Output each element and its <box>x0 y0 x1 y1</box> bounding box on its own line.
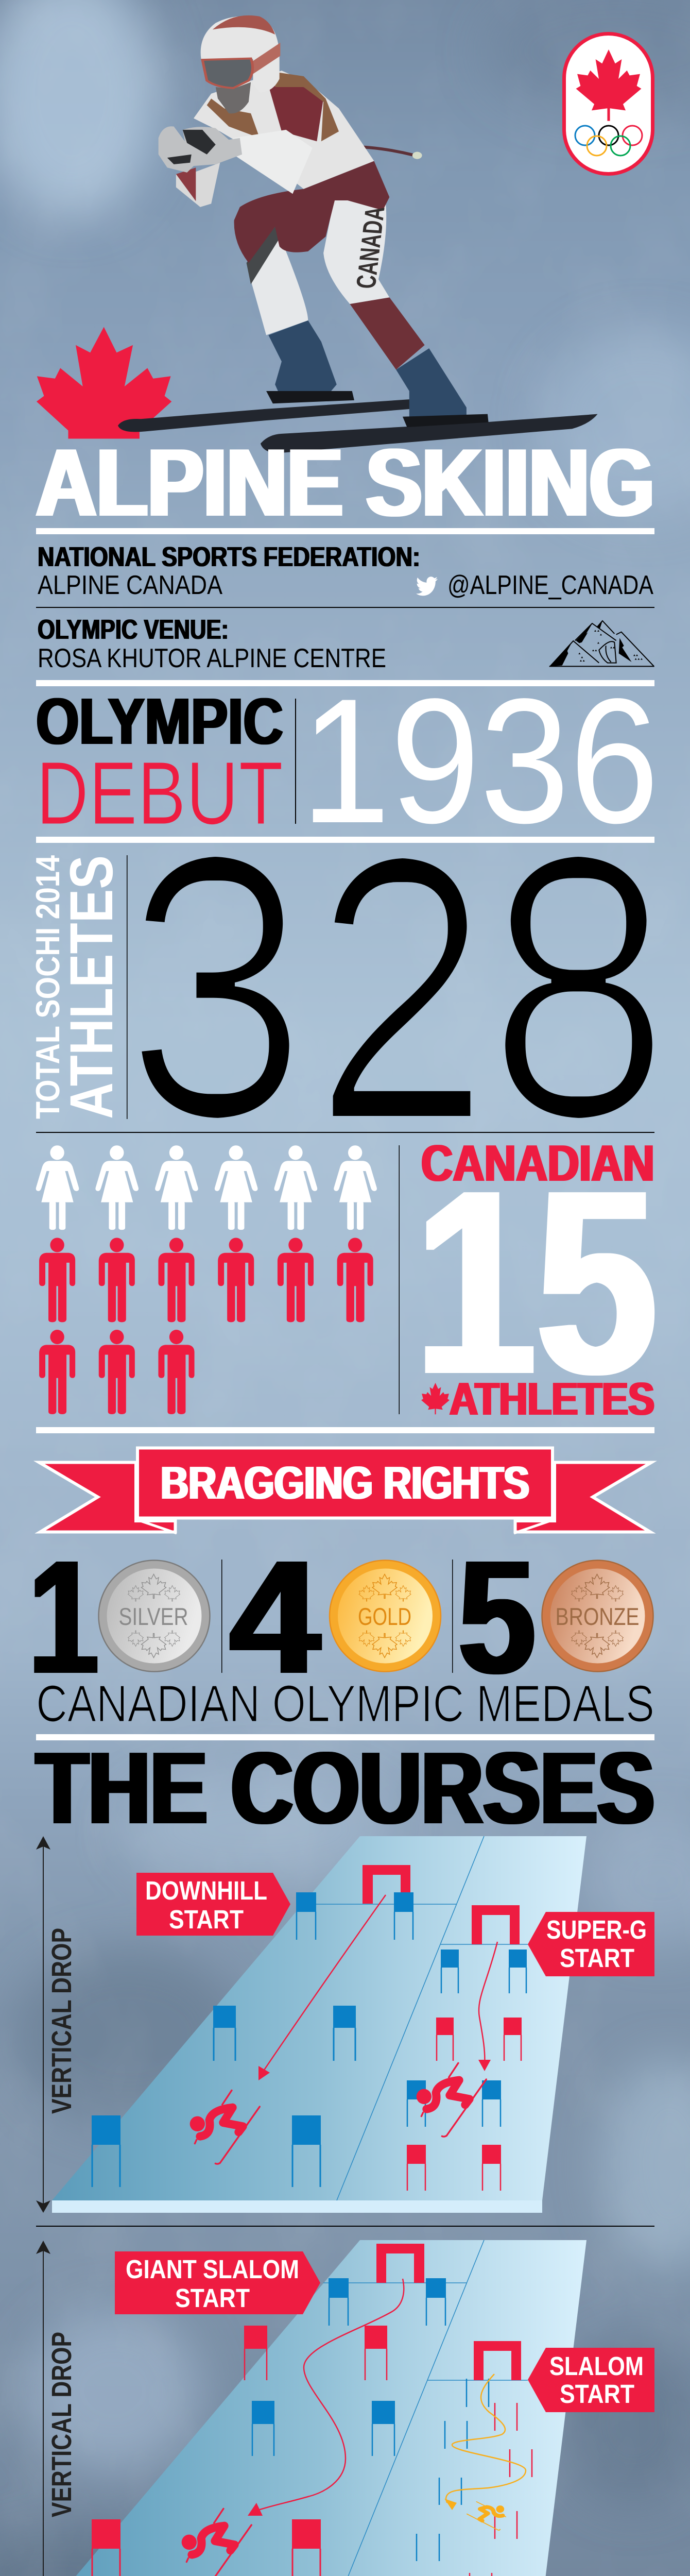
downhill start label: DOWNHILL <box>145 1876 267 1905</box>
federation name: ALPINE CANADA <box>38 570 222 600</box>
total athletes number: 8 <box>486 778 672 1195</box>
large red gates <box>92 2519 321 2576</box>
giant slalom start label <box>115 2251 320 2314</box>
slalom poles <box>417 2379 532 2576</box>
slope <box>52 2240 586 2576</box>
giant slalom start label: START <box>175 2283 250 2313</box>
olympic debut block <box>36 662 659 860</box>
gold medal: GOLD <box>358 1603 411 1631</box>
venue block <box>38 614 386 673</box>
super-g start label: SUPER-G <box>546 1915 647 1944</box>
giant slalom path arrow <box>248 2279 404 2516</box>
men row two <box>39 1330 195 1414</box>
silver medal <box>99 1560 210 1671</box>
men row one <box>39 1238 373 1322</box>
venue name: ROSA KHUTOR ALPINE CENTRE <box>38 643 386 673</box>
canadian athletes stat <box>415 1134 657 1429</box>
face <box>216 82 251 113</box>
women row <box>36 1145 377 1230</box>
super-g start gate <box>472 1905 520 1944</box>
giant slalom start gate <box>376 2244 424 2283</box>
federation heading: NATIONAL SPORTS FEDERATION: <box>38 541 420 572</box>
venue heading: OLYMPIC VENUE: <box>38 614 229 645</box>
banner text: BRAGGING RIGHTS <box>161 1458 529 1509</box>
gold medal <box>330 1560 441 1671</box>
bronze medal: BRONZE <box>555 1603 640 1631</box>
logo: Canadian Olympic Committee <box>564 34 653 174</box>
red gates super-g <box>436 2018 522 2061</box>
silver count: 1 <box>29 1527 98 1707</box>
slope <box>52 1836 586 2213</box>
twitter handle: @ALPINE_CANADA <box>447 570 653 600</box>
gold count: 4 <box>230 1527 321 1707</box>
helmet and goggles <box>201 15 280 93</box>
banner: bragging rights <box>39 1448 651 1533</box>
red skier giant slalom <box>182 2509 251 2576</box>
start lines <box>323 2283 528 2380</box>
giant slalom start label: GIANT SLALOM <box>126 2255 299 2284</box>
downhill start gate <box>363 1865 410 1904</box>
downhill start label <box>136 1873 290 1936</box>
course diagram: giant slalom and slalom <box>36 2240 654 2576</box>
rotated label: total sochi 2014: TOTAL SOCHI 2014 <box>29 855 66 1119</box>
blue gates upper <box>329 2278 446 2326</box>
debut year: 1936 <box>301 662 659 860</box>
bronze count: 5 <box>458 1527 536 1707</box>
slalom start gate <box>474 2341 521 2380</box>
olympic label: OLYMPIC <box>36 685 283 758</box>
start line downhill <box>316 1904 528 1944</box>
total athletes number: 3 <box>124 778 309 1195</box>
super-g start label <box>528 1912 654 1976</box>
vertical drop label: VERTICAL DROP <box>46 1928 77 2114</box>
debut label: DEBUT <box>36 743 283 843</box>
slalom start label <box>528 2348 654 2412</box>
vertical drop label: VERTICAL DROP <box>46 2332 77 2517</box>
red gates lower right <box>407 2145 501 2191</box>
total athletes number: 2 <box>312 779 492 1197</box>
rotated label: athletes: ATHLETES <box>58 855 126 1119</box>
vertical drop arrow <box>36 2241 50 2576</box>
maple leaf large <box>37 327 171 438</box>
red gates middle <box>244 2326 387 2380</box>
total athletes block <box>29 778 672 1197</box>
blue gates lower right <box>407 2080 501 2127</box>
downhill start label: START <box>169 1905 244 1934</box>
blue gates top <box>296 1892 413 1940</box>
slalom path arrow <box>444 2374 526 2510</box>
red skier super-g <box>417 2063 486 2137</box>
blue gates super-g <box>441 1950 527 1993</box>
large blue gates lower <box>92 2115 321 2187</box>
medal tally <box>29 1527 653 1707</box>
pictogram: 6 women 9 men <box>36 1145 377 1414</box>
super-g start label: START <box>560 1943 634 1973</box>
canadian label: CANADIAN <box>421 1134 654 1192</box>
large blue gates upper <box>213 2006 356 2061</box>
legs <box>234 161 425 370</box>
total athletes number <box>124 778 672 1197</box>
slalom start label: SLALOM <box>549 2351 644 2381</box>
slalom start label: START <box>560 2379 634 2409</box>
logo maple leaf <box>576 49 642 121</box>
torso <box>194 71 374 189</box>
skier photo illustration <box>118 15 598 453</box>
logo olympic rings <box>575 126 642 156</box>
boots <box>266 320 489 427</box>
silver medal: SILVER <box>118 1603 188 1631</box>
course diagram: downhill and super-g <box>36 1836 654 2213</box>
super-g path arrow <box>478 1942 497 2071</box>
orange skier <box>467 2502 506 2530</box>
icon: small maple leaf <box>421 1383 450 1414</box>
red skier downhill <box>190 2090 260 2164</box>
pole <box>247 146 422 159</box>
legs: CANADA <box>351 206 391 290</box>
bronze medal <box>542 1560 653 1671</box>
skis <box>118 399 598 453</box>
blue gates middle <box>252 2401 395 2456</box>
arms and gloves <box>159 126 313 207</box>
downhill path arrow <box>258 1895 386 2080</box>
vertical drop arrow <box>36 1836 50 2213</box>
icon: mountains <box>549 621 654 666</box>
athletes label: ATHLETES <box>450 1374 654 1425</box>
icon: twitter bird <box>416 577 438 596</box>
federation block <box>38 541 653 600</box>
